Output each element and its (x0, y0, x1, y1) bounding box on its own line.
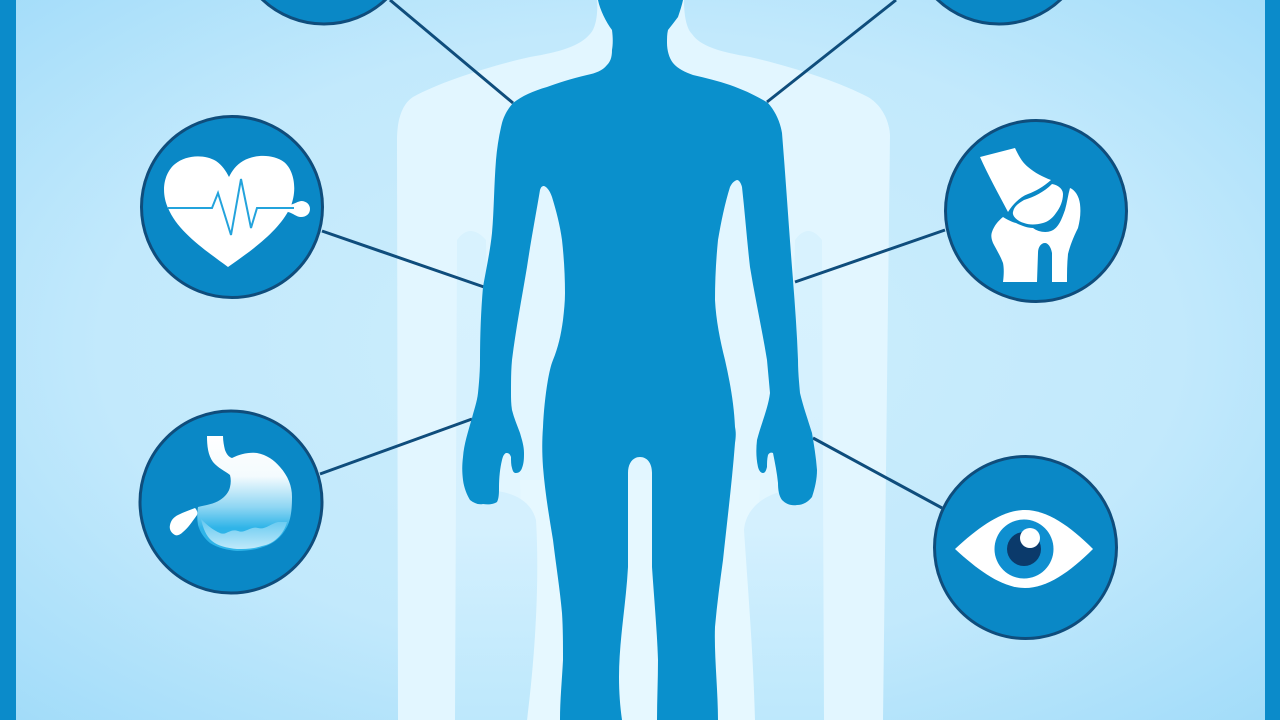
ghost inner legs (520, 480, 760, 720)
connector lines (320, 0, 945, 508)
femur shaft (980, 148, 1051, 212)
ghost body silhouette (397, 0, 890, 720)
icon: top right partial circle (909, 0, 1089, 24)
pylorus (170, 508, 197, 535)
icon: stomach (140, 411, 322, 593)
femur condyle (1013, 184, 1063, 224)
icon: heart with pulse (142, 116, 322, 298)
central body silhouette (462, 0, 817, 720)
ghost leg bands (455, 231, 824, 720)
stomach fluid (201, 519, 287, 549)
tibia (991, 188, 1080, 282)
icon: eye (934, 456, 1116, 638)
icon: knee joint (946, 120, 1126, 302)
stomach body (197, 436, 292, 551)
icon: top left partial circle (234, 0, 414, 24)
